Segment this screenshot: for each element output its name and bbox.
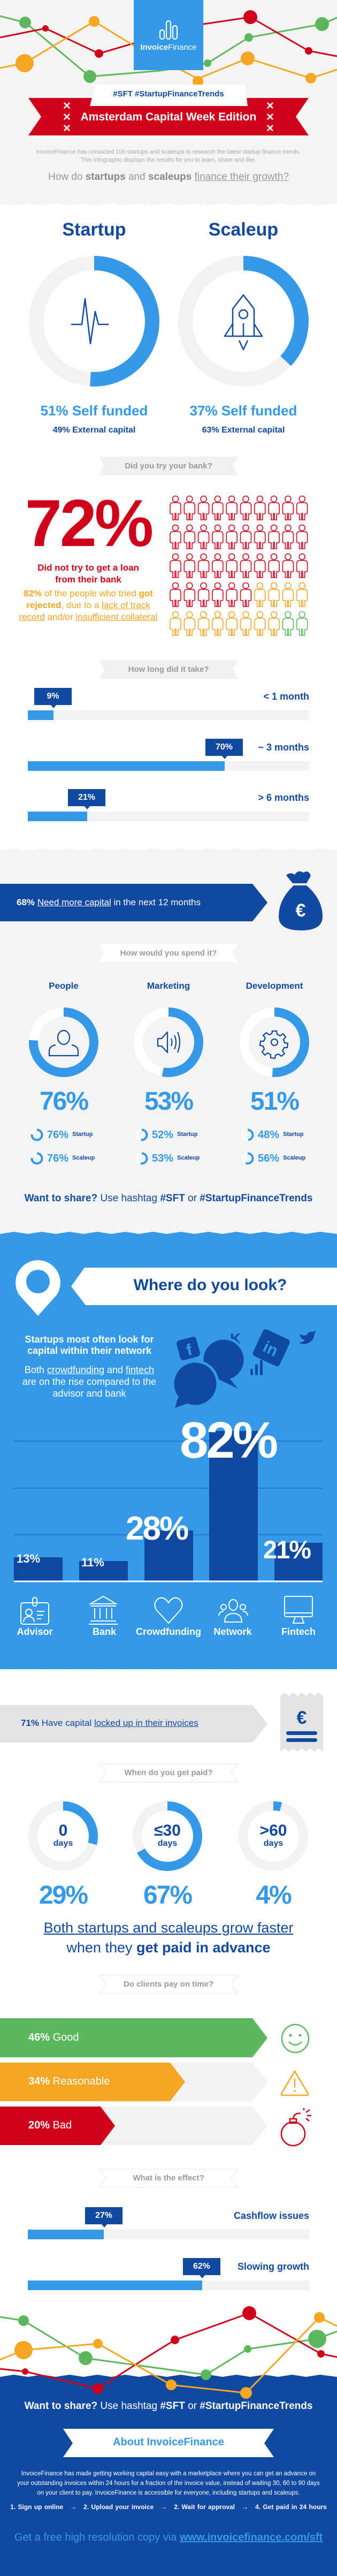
panel: paid in 0 days: days [53,1839,73,1848]
ribbon heading: How would you spend it? [99,944,238,963]
ribbon heading: How long did it take?: How long did it take? [128,665,209,674]
icon: advisor [20,1597,49,1625]
logo: InvoiceFinance [134,0,203,70]
icon: invoice receipt: € [297,1708,307,1728]
bar chart: client payment behaviour: 46% Good [28,2032,79,2043]
bar: > 6 months 21%: 21% [78,793,95,802]
text block: network finding: Both crowdfunding and fintech are on the rise compared to the advisor and bank [22,1365,156,1399]
ribbon heading: Did you try your bank? [99,457,238,475]
bar chart: time to loan: ~ 3 months [258,742,309,753]
header decorative line chart [0,10,337,85]
panel: spend on people [29,981,98,1165]
panel: paid after 60 days [239,1801,308,1910]
bar chart: effect of late payment: Slowing growth [238,2261,309,2272]
panel: startup funding [29,219,159,435]
bar chart: where do you look: 82% [180,1412,277,1469]
icon row: source categories: Advisor [17,1626,53,1637]
icon row: source categories: Crowdfunding [136,1626,201,1637]
icon row: source categories [17,1595,316,1637]
banner: 71% capital locked in invoices [0,1705,267,1742]
icon row: source categories: Network [213,1626,251,1637]
icon: gear [260,1031,288,1058]
stat: 72% did not try bank: Did not try to get a loan [37,563,139,573]
bar chart: where do you look: 13% [17,1552,40,1565]
bar: < 1 month 9%: 9% [47,692,59,701]
heading band: Where do you look? [71,1268,337,1305]
icon row: source categories: Bank [93,1626,116,1637]
ribbon heading: How would you spend it?: How would you spend it? [120,949,217,958]
panel: spend on people: 76% [47,1129,68,1141]
donut: scaleup 37% [178,256,309,387]
logo: InvoiceFinance: InvoiceFinance [140,43,197,52]
ribbon: hashtag and edition: ✕ [266,123,274,134]
text block: network finding: Startups most often look for capital within their network [25,1334,154,1356]
ribbon heading: Did you try your bank?: Did you try your bank? [125,461,212,471]
icon: warning triangle [280,2070,310,2096]
icon row: source categories: Fintech [281,1626,316,1637]
ribbon heading: What is the effect? [99,2169,238,2187]
panel: startup funding: 51% Self funded [41,403,148,419]
ribbon heading: What is the effect?: What is the effect? [133,2173,204,2183]
intro text: InvoiceFinance has contacted 100 startups and scaleups to research the latest startup finance trends. This infographic displays the results for you to learn, share and like. [36,149,301,163]
icon: social network cluster: f [185,1341,195,1359]
icon: rocket [225,295,262,350]
panel: startup funding: 49% External capital [53,426,135,435]
text block: about paragraph: InvoiceFinance has made getting working capital easy with a marketplace where you can get an advance on your outstanding invoices within 24 hours for a fraction of the invoice value, instead of waiting 30, 60 to 90 days on your client to pay. InvoiceFinance is accessible for everyone, including startups and scaleups. [17,2471,320,2496]
panel: paid after 60 days: >60 [260,1822,287,1839]
background: gray capital section [0,851,337,1237]
ribbon: About InvoiceFinance [63,2429,274,2457]
stat: 72% did not try bank: from their bank [55,574,121,585]
panel: scaleup funding: 37% Self funded [190,403,297,419]
panel: spend on development: Startup [283,1131,304,1138]
footer decorative line chart [0,2302,337,2409]
icon: money bag euro [279,872,323,930]
panel: paid within 30 days [133,1801,202,1910]
panel: paid in 0 days [28,1801,98,1910]
panel: spend on marketing: 53% [144,1087,193,1116]
icon: speaker [158,1032,180,1052]
ribbon heading: Do clients pay on time?: Do clients pay on time? [124,1980,213,1989]
pictogram: 50 people [170,496,308,636]
panel: spend on people: Startup [72,1131,93,1138]
ribbon: hashtag and edition: ✕ [266,101,274,112]
icon: bank [89,1595,118,1625]
panel: paid within 30 days: 67% [143,1881,192,1910]
ribbon: hashtag and edition: ✕ [63,123,71,134]
ribbon heading: When do you get paid? [99,1763,238,1783]
statement: grow faster when paid in advance: when they get paid in advance [66,1939,271,1956]
stat: 72% did not try bank: 72% [25,487,151,560]
icon: logo bars [159,20,178,40]
bar: ~3 months 70% [205,739,243,756]
panel: spend on people: Scaleup [72,1155,95,1161]
ribbon heading: How long did it take? [99,660,238,679]
bar: cashflow issues 27%: 27% [95,2211,112,2220]
panel: spend on marketing: Scaleup [177,1155,200,1161]
bar: slowing growth 62% [183,2258,220,2275]
ribbon: hashtag and edition: ✕ [63,112,71,123]
ribbon heading: Do clients pay on time? [99,1975,238,1994]
icon: network people [218,1599,248,1623]
panel: spend on development [240,981,309,1165]
ribbon: hashtag and edition: Amsterdam Capital Week Edition [81,111,256,123]
bar: ~3 months 70%: 70% [216,743,233,752]
panel: spend on people: 76% [40,1087,88,1116]
statement: grow faster when paid in advance [44,1920,293,1956]
banner: 71% capital locked in invoices: 71% Have capital locked up in their invoices [21,1718,198,1728]
panel: spend on people: 76% [47,1153,68,1164]
panel: spend on development: Development [246,981,303,991]
bar chart: time to loan: < 1 month [263,691,309,702]
bar: > 6 months 21% [68,789,105,806]
panel: spend on development: 56% [258,1153,279,1164]
bar chart: client payment behaviour: 34% Reasonable [28,2075,110,2087]
wavy edge gray to white [0,203,337,205]
icon: person [49,1031,78,1056]
panel: startup funding: Startup [62,219,126,240]
banner: 68% need more capital: 68% Need more capital in the next 12 months [17,897,201,907]
bar chart: where do you look: 11% [81,1556,104,1569]
share hashtag line: Want to share? Use hashtag #SFT or #StartupFinanceTrends [25,1193,312,1204]
stat: 72% did not try bank [19,487,157,622]
panel: spend on development: 48% [258,1129,279,1141]
panel: scaleup funding [178,219,309,435]
share hashtag line footer: Want to share? Use hashtag #SFT or #StartupFinanceTrends [25,2400,312,2412]
background: top gray header section [0,0,337,205]
bar chart: where do you look: 28% [126,1510,188,1547]
icon: location pin [16,1260,60,1316]
donut: startup 51% [29,256,159,387]
panel: paid in 0 days: 29% [39,1881,87,1910]
heading band: Where do you look?: Where do you look? [134,1276,287,1294]
statement: grow faster when paid in advance: Both startups and scaleups grow faster [44,1920,293,1936]
question heading: How do startups and scaleups finance their growth? [48,171,289,183]
icon: social network cluster: K [230,1330,241,1347]
icon: pulse [72,299,108,344]
icon: bomb [279,2108,313,2147]
ribbon: About InvoiceFinance: About InvoiceFinance [113,2436,224,2448]
ribbon: hashtag and edition [28,85,309,135]
background: blue 'where do you look' section [0,1236,337,1669]
bar chart: where do you look [14,1412,323,1582]
panel: paid after 60 days: 4% [256,1881,291,1910]
icon: social network cluster: in [260,1338,281,1360]
bar chart: effect of late payment: Cashflow issues [234,2210,309,2221]
icon: money bag euro: € [296,900,306,921]
background: dark blue footer [0,2378,337,2576]
bar chart: time to loan [28,688,309,821]
icon: invoice receipt [280,1693,323,1752]
panel: paid within 30 days: days [158,1839,177,1848]
panel: scaleup funding: 63% External capital [202,426,285,435]
panel: paid in 0 days: 0 [59,1822,67,1839]
bar: cashflow issues 27% [85,2207,122,2224]
panel: scaleup funding: Scaleup [209,219,278,240]
panel: spend on marketing: 52% [152,1129,173,1141]
panel: spend on people: People [49,981,79,991]
ribbon: hashtag and edition: ✕ [63,101,71,112]
text block: network finding [22,1334,156,1399]
panel: spend on marketing [134,981,203,1165]
ribbon heading: When do you get paid?: When do you get paid? [124,1768,213,1777]
ribbon: hashtag and edition: ✕ [266,112,274,123]
panel: spend on development: Scaleup [283,1155,305,1161]
icon: computer fintech [284,1596,313,1624]
panel: spend on marketing: Startup [177,1131,198,1138]
icon: social network cluster [174,1329,316,1408]
panel: spend on marketing: Marketing [147,981,190,991]
steps row: 1. Sign up online → 2. Upload your invoice → 2. Wait for approval → 4. Get paid in 24 hours [10,2503,327,2511]
bar chart: time to loan: > 6 months [258,792,309,803]
bar: slowing growth 62%: 62% [193,2262,210,2271]
ribbon: hashtag and edition: #SFT #StartupFinanceTrends [113,89,224,99]
icon: smiley [281,2024,310,2054]
bar chart: effect of late payment [0,2204,337,2293]
bar chart: where do you look: 21% [263,1535,311,1564]
call to action: high resolution copy: Get a free high resolution copy via www.invoicefinance.com/sft [14,2532,323,2543]
bar: < 1 month 9% [34,688,72,705]
panel: spend on marketing: 53% [152,1153,173,1164]
bar chart: client payment behaviour: 20% Bad [28,2119,72,2131]
panel: paid after 60 days: days [264,1839,283,1848]
bar chart: client payment behaviour [0,2018,337,2147]
panel: paid within 30 days: ≤30 [154,1822,181,1839]
stat: 72% did not try bank: 82% of the people who tried got rejected, due to a lack of track record and/or insufficient collateral [19,588,157,622]
banner: 68% need more capital [0,884,267,921]
icon: heart crowdfunding [154,1597,183,1624]
panel: spend on development: 51% [250,1087,298,1116]
